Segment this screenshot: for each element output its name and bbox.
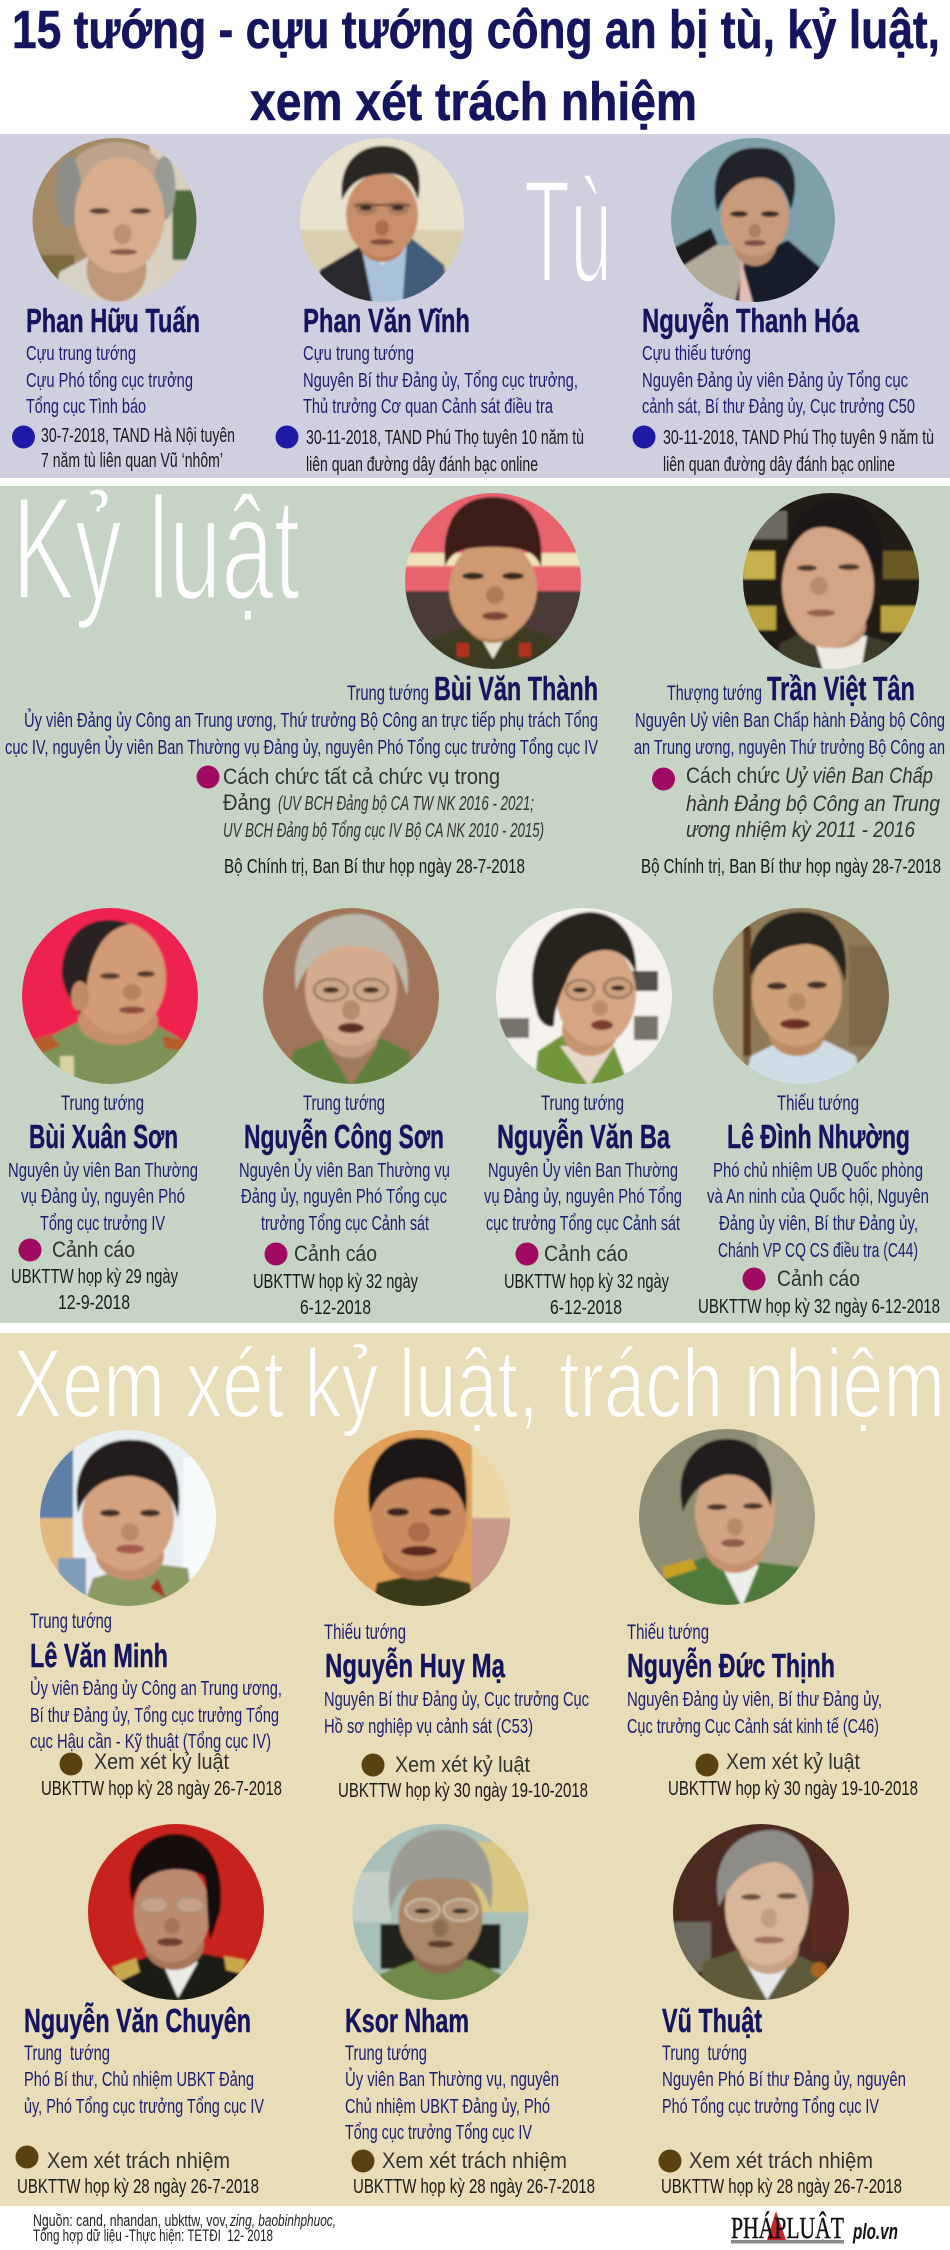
role text — [26, 342, 193, 418]
bullet — [196, 766, 220, 788]
person: Phan Văn Vĩnh — [276, 130, 584, 476]
footer sources: Nguồn: cand, nhandan, ubkttw, vov, — [33, 2211, 228, 2230]
role text — [345, 2042, 559, 2144]
role text: Tổng cục trưởng IV — [40, 1212, 165, 1235]
status: Xem xét trách nhiệm — [689, 2148, 873, 2173]
footer sources — [33, 2211, 336, 2245]
role text — [662, 2042, 906, 2118]
decision text: UBKTTW họp kỳ 28 ngày 26-7-2018 — [41, 1777, 282, 1800]
person: Bùi Xuân Sơn — [8, 906, 200, 1314]
status: Xem xét trách nhiệm — [382, 2148, 567, 2173]
photo: Lê Đình Nhường — [711, 906, 891, 1086]
person: Lê Đình Nhường — [698, 906, 940, 1318]
role text: trưởng Tổng cục Cảnh sát — [261, 1212, 429, 1235]
name line: Trung tướng — [347, 682, 429, 705]
person: Phan Hữu Tuấn — [12, 130, 235, 472]
penalty text: Cách chức tất cả chức vụ trong — [223, 764, 500, 789]
person: Nguyễn Văn Ba — [484, 906, 682, 1319]
title: xem xét trách nhiệm — [250, 72, 697, 132]
decision text: UBKTTW họp kỳ 28 ngày 26-7-2018 — [353, 2175, 595, 2198]
name line: Thượng tướng — [667, 682, 762, 705]
role text — [484, 1158, 682, 1235]
bullet — [352, 2150, 374, 2172]
role text: Nguyên Ủy viên Ban Thường — [488, 1158, 678, 1182]
name: Bùi Xuân Sơn — [29, 1118, 178, 1155]
verdict text: liên quan đường dây đánh bạc online — [306, 453, 538, 476]
verdict text — [41, 424, 235, 472]
role text: cục Hậu cần - Kỹ thuật (Tổng cục IV) — [30, 1730, 271, 1753]
role text: cục trưởng Tổng cục Cảnh sát — [486, 1212, 680, 1235]
role text: Thủ trưởng Cơ quan Cảnh sát điều tra — [303, 395, 553, 418]
name: Nguyễn Thanh Hóa — [642, 302, 859, 339]
photo: Bùi Xuân Sơn — [20, 906, 200, 1086]
role text: Chủ nhiệm UBKT Đảng ủy, Phó — [345, 2095, 550, 2118]
penalty text: (UV BCH Đảng bộ CA TW NK 2016 - 2021; — [278, 793, 534, 815]
photo: Nguyễn Văn Ba — [494, 906, 674, 1086]
role text — [303, 342, 578, 418]
status: Xem xét kỷ luật — [395, 1752, 531, 1777]
photo: Phan Hữu Tuấn — [32, 138, 196, 302]
bullet — [16, 2146, 38, 2168]
penalty: Cảnh cáo — [544, 1241, 628, 1266]
role text — [642, 342, 915, 418]
penalty text — [686, 763, 940, 842]
bullet — [18, 1238, 42, 1262]
person: Ksor Nham — [345, 1822, 595, 2198]
role text: Đảng ủy, nguyên Phó Tổng cục — [241, 1185, 447, 1208]
person: Nguyễn Thanh Hóa — [632, 130, 934, 476]
role text: vụ Đảng ủy, nguyên Phó Tổng — [484, 1185, 682, 1208]
name: Nguyễn Huy Mạ — [325, 1647, 505, 1684]
photo: Trần Việt Tân — [741, 491, 921, 671]
penalty text: UV BCH Đảng bộ Tổng cục IV Bộ CA NK 2010 - 2015) — [223, 820, 544, 842]
rank: Trung tướng — [541, 1092, 624, 1115]
decision text: 12-9-2018 — [58, 1291, 130, 1314]
role text: Tổng cục trưởng Tổng cục IV — [345, 2121, 532, 2144]
penalty: Cảnh cáo — [52, 1237, 135, 1262]
role text — [8, 1159, 198, 1235]
name line — [347, 670, 598, 707]
rank: Thiếu tướng — [777, 1092, 859, 1115]
role text: ủy, Phó Tổng cục trưởng Tổng cục IV — [24, 2095, 264, 2118]
name: Lê Văn Minh — [30, 1637, 168, 1674]
role text — [24, 2042, 264, 2118]
decision text: UBKTTW họp kỳ 32 ngày — [253, 1270, 419, 1293]
decision text: UBKTTW họp kỳ 28 ngày 26-7-2018 — [17, 2175, 259, 2198]
rank: Trung tướng — [30, 1610, 112, 1633]
person: Nguyễn Công Sơn — [239, 906, 450, 1319]
name: Ksor Nham — [345, 2002, 469, 2039]
verdict text — [663, 426, 934, 476]
bullet — [516, 1242, 538, 1266]
role text — [627, 1688, 882, 1738]
bullet — [60, 1752, 82, 1776]
logo: Pháp Luật plo.vn: PHÁPLUẬT — [731, 2210, 844, 2245]
status: Xem xét kỷ luật — [726, 1749, 861, 1774]
role text: Trung tướng — [662, 2042, 747, 2065]
role text: Nguyên Bí thư Đảng ủy, Tổng cục trưởng, — [303, 369, 578, 392]
person: Nguyễn Huy Mạ — [324, 1428, 589, 1802]
role text: Nguyên Ủy viên Ban Thường vụ — [239, 1158, 450, 1182]
photo: Nguyễn Công Sơn — [261, 906, 441, 1086]
role text: Bí thư Đảng ủy, Tổng cục trưởng Tổng — [30, 1704, 279, 1727]
role text: Nguyên ủy viên Ban Thường — [8, 1159, 198, 1182]
rank: Thiếu tướng — [324, 1621, 406, 1644]
bullet — [652, 768, 675, 790]
bullet — [658, 2150, 682, 2172]
role text: Ủy viên Ban Thường vụ, nguyên — [345, 2067, 559, 2091]
role text — [707, 1159, 929, 1262]
penalty: Cảnh cáo — [777, 1266, 860, 1291]
panel: Xem xét kỷ luật, trách nhiệm — [0, 1329, 950, 2206]
name: Nguyễn Văn Chuyên — [24, 2002, 251, 2039]
name: Nguyễn Công Sơn — [244, 1118, 444, 1155]
verdict text: 7 năm tù liên quan Vũ ‘nhôm’ — [41, 449, 223, 472]
role text: Ủy viên Đảng ủy Công an Trung ương, Thứ trưởng Bộ Công an trực tiếp phụ trách Tổng — [24, 708, 598, 732]
bullet — [12, 426, 35, 448]
photo: Bùi Văn Thành — [403, 491, 583, 671]
bullet — [362, 1754, 384, 1776]
decision text: UBKTTW họp kỳ 30 ngày 19-10-2018 — [338, 1779, 588, 1802]
verdict text — [306, 426, 584, 476]
role text: Hồ sơ nghiệp vụ cảnh sát (C53) — [324, 1715, 533, 1738]
footer sources: Tổng hợp dữ liệu -Thực hiện: TETĐI 12- 2018 — [33, 2226, 273, 2245]
name: Nguyễn Văn Ba — [497, 1118, 670, 1155]
person: Vũ Thuật — [658, 1822, 906, 2198]
decision text — [11, 1265, 179, 1314]
bullet — [276, 426, 298, 448]
role text: vụ Đảng ủy, nguyên Phó — [21, 1185, 185, 1208]
photo: Nguyễn Văn Chuyên — [86, 1822, 266, 2002]
name: Vũ Thuật — [662, 2002, 762, 2039]
bullet — [632, 426, 656, 448]
heading: Kỷ luật: Kỷ luật — [12, 467, 300, 631]
penalty text: Cách chức — [686, 763, 780, 788]
photo: Phan Văn Vĩnh — [300, 138, 464, 302]
role text — [634, 709, 945, 759]
role text: cục IV, nguyên Ủy viên Ban Thường vụ Đảng ủy, nguyên Phó Tổng cục trưởng Tổng cục IV — [5, 735, 598, 759]
rank: Thiếu tướng — [627, 1621, 709, 1644]
role text — [30, 1676, 282, 1753]
decision text: 6-12-2018 — [300, 1296, 371, 1319]
verdict text: 30-7-2018, TAND Hà Nội tuyên — [41, 424, 235, 447]
person: Bùi Văn Thành — [5, 491, 598, 878]
photo: Ksor Nham — [350, 1822, 530, 2002]
panel: Kỷ luật — [0, 467, 950, 1323]
photo: Vũ Thuật — [671, 1822, 851, 2002]
name line — [667, 670, 915, 707]
role text — [239, 1158, 450, 1235]
logo: Pháp Luật plo.vn: plo.vn — [852, 2219, 898, 2244]
person: Nguyễn Văn Chuyên — [16, 1822, 266, 2198]
photo: Nguyễn Thanh Hóa — [671, 138, 835, 302]
photo: Nguyễn Huy Mạ — [332, 1428, 512, 1608]
decision text: Bộ Chính trị, Ban Bí thư họp ngày 28-7-2018 — [224, 855, 525, 878]
bullet — [696, 1754, 718, 1776]
role text: Trung tướng — [345, 2042, 427, 2065]
title — [12, 0, 940, 132]
role text: Nguyên Bí thư Đảng ủy, Cục trưởng Cục — [324, 1688, 589, 1711]
name: Nguyễn Đức Thịnh — [627, 1647, 835, 1684]
photo: Lê Văn Minh — [38, 1428, 218, 1608]
role text: Phó Bí thư, Chủ nhiệm UBKT Đảng — [24, 2068, 254, 2091]
penalty text: Đảng — [223, 790, 271, 815]
bullet — [264, 1242, 288, 1266]
role text — [324, 1688, 589, 1738]
role text: Cựu Phó tổng cục trưởng — [26, 369, 193, 392]
role text: Cựu thiếu tướng — [642, 342, 751, 365]
rank: Trung tướng — [61, 1092, 144, 1115]
role text: Cựu trung tướng — [303, 342, 414, 365]
role text — [5, 708, 598, 759]
name: Phan Hữu Tuấn — [26, 302, 200, 339]
person: Nguyễn Đức Thịnh — [627, 1427, 918, 1800]
decision text: 6-12-2018 — [550, 1296, 622, 1319]
name line: Bùi Văn Thành — [434, 670, 598, 707]
photo: Nguyễn Đức Thịnh — [637, 1427, 817, 1607]
bullet — [742, 1268, 766, 1290]
heading: Tù: Tù — [524, 150, 612, 314]
role text: Cựu trung tướng — [26, 342, 136, 365]
role text: Tổng cục Tình báo — [26, 395, 146, 418]
rank: Trung tướng — [303, 1092, 385, 1115]
decision text — [504, 1270, 670, 1319]
role text: Ủy viên Đảng ủy Công an Trung ương, — [30, 1676, 282, 1700]
decision text — [253, 1270, 419, 1319]
verdict text: 30-11-2018, TAND Phú Thọ tuyên 10 năm tù — [306, 426, 584, 449]
decision text: UBKTTW họp kỳ 29 ngày — [11, 1265, 179, 1288]
person: Trần Việt Tân — [634, 491, 945, 878]
penalty: Cảnh cáo — [294, 1241, 377, 1266]
footer sources: zing, baobinhphuoc, — [229, 2211, 336, 2230]
status: Xem xét kỷ luật — [94, 1749, 230, 1774]
penalty text — [223, 764, 544, 842]
role text: Trung tướng — [24, 2042, 110, 2065]
decision text: UBKTTW họp kỳ 32 ngày — [504, 1270, 670, 1293]
name: Phan Văn Vĩnh — [303, 302, 470, 339]
panel: Tù — [0, 130, 950, 478]
status: Xem xét trách nhiệm — [47, 2148, 230, 2173]
person: Lê Văn Minh — [30, 1428, 282, 1800]
